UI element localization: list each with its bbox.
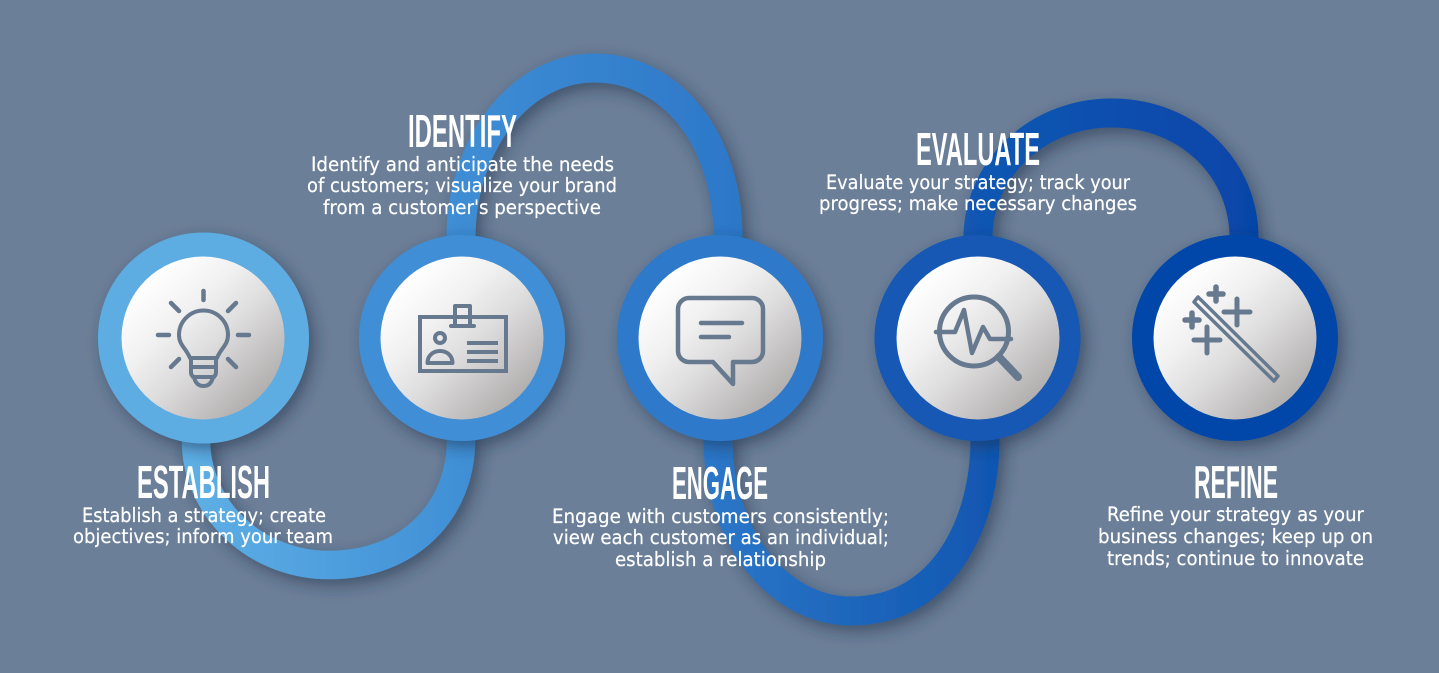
description: engage: view each customer as an individual; [553, 526, 889, 549]
step circle: establish [98, 232, 309, 444]
description: establish: Establish a strategy; create [82, 504, 326, 527]
description: evaluate: Evaluate your strategy; track your [826, 171, 1131, 194]
step circle: engage [617, 235, 823, 441]
text block: evaluate [819, 123, 1137, 215]
step circle: identify [359, 235, 565, 441]
description: identify: from a customer's perspective [323, 196, 601, 219]
heading: evaluate: EVALUATE [916, 123, 1040, 175]
text block: engage [552, 457, 889, 571]
connector arc: engage to evaluate [718, 430, 985, 611]
description: refine: business changes; keep up on [1098, 525, 1373, 548]
description: establish: objectives; inform your team [73, 525, 333, 548]
icon: magnifier with pulse [936, 297, 1018, 377]
heading: identify: IDENTIFY [408, 105, 517, 157]
icon: speech bubble [678, 298, 763, 384]
connector arc: evaluate to refine [978, 113, 1244, 248]
text block: refine: REFINE [1194, 456, 1278, 508]
heading: establish: ESTABLISH [137, 456, 270, 508]
connector arc: identify to engage [461, 68, 728, 248]
description: evaluate: progress; make necessary changes [819, 192, 1137, 215]
text block: refine [1098, 456, 1373, 570]
description: engage [552, 505, 889, 571]
description: establish [73, 504, 333, 548]
connector arc: establish to identify [196, 430, 461, 565]
step circle: refine [1132, 235, 1338, 441]
description: refine: Refine your strategy as your [1107, 503, 1365, 526]
description: engage: Engage with customers consistently; [552, 505, 889, 528]
text block: establish [73, 456, 333, 548]
step circle: evaluate [874, 235, 1080, 441]
description: refine [1098, 503, 1373, 570]
icon: light bulb [158, 291, 249, 386]
text block: engage: ENGAGE [672, 457, 768, 509]
description: identify [307, 153, 617, 219]
description: evaluate [819, 171, 1137, 215]
description: identify: of customers; visualize your brand [307, 174, 617, 197]
description: engage: establish a relationship [615, 548, 826, 571]
description: refine: trends; continue to innovate [1107, 547, 1364, 570]
icon: id badge [420, 306, 506, 371]
icon: magic wand [1185, 287, 1278, 381]
text block: identify [307, 105, 617, 219]
description: identify: Identify and anticipate the needs [311, 153, 614, 176]
